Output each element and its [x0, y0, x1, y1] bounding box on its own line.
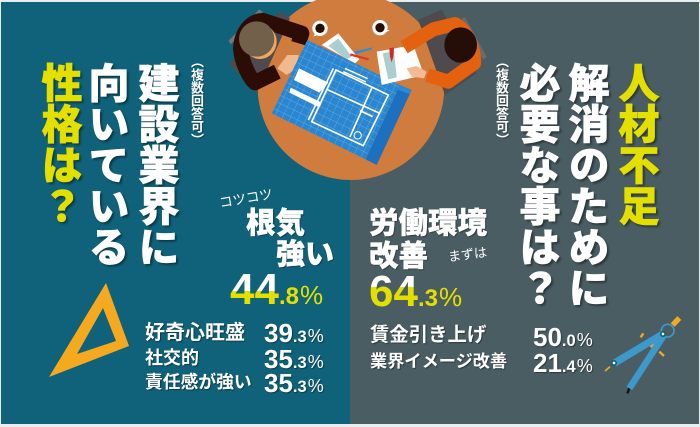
top result left [230, 207, 334, 314]
row 2 label: 業界イメージ改善 [370, 351, 507, 371]
notebook and pens [322, 33, 372, 63]
heading line 1: 性格は？ [35, 62, 81, 226]
table [258, 0, 444, 180]
note: multiple answers left: （複数回答可） [189, 55, 204, 146]
value 64.3%: 64.3% [369, 267, 462, 316]
list: right results [370, 322, 594, 378]
label: kotsukotsu: コツコツ [218, 186, 274, 211]
heading line 3: 人材不足 [612, 62, 658, 226]
person right [377, 9, 487, 95]
row 3 value: 35.3% [264, 368, 324, 398]
heading: left question [35, 62, 182, 268]
label: working environment: 労働環境 [369, 207, 487, 240]
heading: right question [513, 62, 662, 308]
heading line 2: 向いている [82, 62, 128, 267]
person left [229, 9, 302, 93]
blueprint [272, 40, 412, 165]
icon: compass [605, 318, 679, 393]
list: left results [145, 318, 324, 398]
label: strength: 強い [276, 239, 334, 271]
heading line 2: 解消のために [562, 62, 608, 308]
panel: right background [350, 2, 699, 424]
row 1 value: 50.0% [533, 322, 593, 352]
note: multiple answers right: （複数回答可） [494, 55, 509, 146]
value 44.8%: 44.8% [230, 265, 323, 314]
heading line 1: 必要な事は？ [513, 62, 559, 308]
row 3 label: 責任感が強い [145, 372, 252, 392]
row 2 value: 35.3% [264, 344, 324, 374]
top result right [369, 207, 488, 316]
heading line 3: 建設業界に [132, 62, 178, 267]
row 1 label: 賃金引き上げ [370, 324, 486, 346]
row 1 value: 39.3% [264, 318, 324, 348]
label: perseverance: 根気 [246, 207, 305, 240]
row 1 label: 好奇心旺盛 [145, 322, 245, 344]
label: improvement: 改善 [369, 240, 428, 273]
coffee cups [312, 20, 390, 37]
panel: left background [1, 2, 350, 424]
label: first of all: まずは [447, 245, 488, 264]
icon: set square [49, 283, 129, 377]
row 2 value: 21.4% [533, 348, 593, 378]
row 2 label: 社交的 [145, 348, 199, 368]
